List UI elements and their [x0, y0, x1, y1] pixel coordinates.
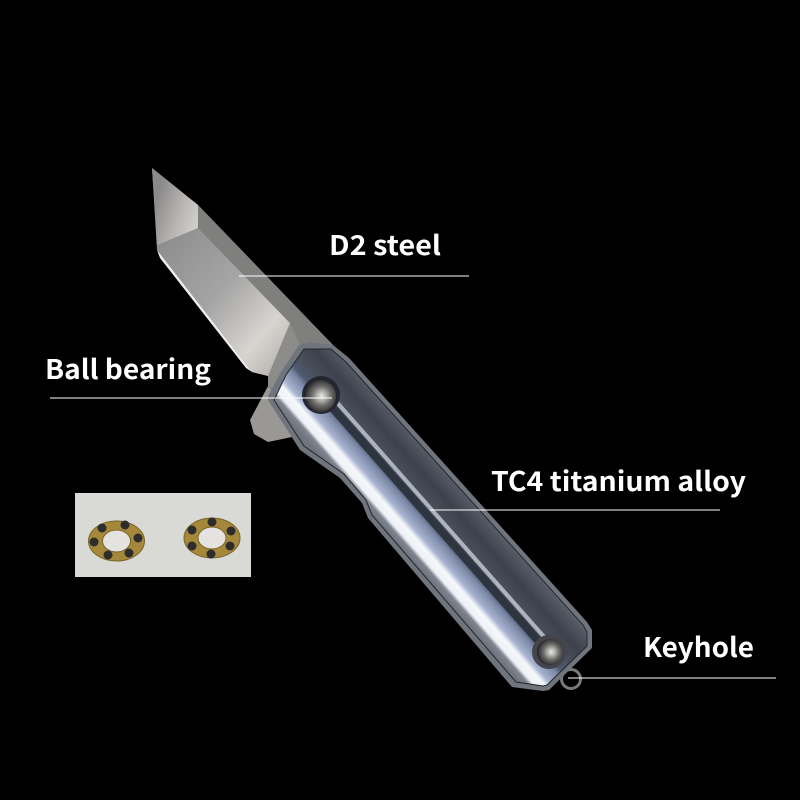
callout: Ball bearing: Ball bearing: [45, 348, 211, 387]
pin: rear screw: [532, 635, 566, 669]
knife illustration: [152, 168, 592, 691]
central rib: [321, 390, 553, 652]
handle: [268, 342, 592, 691]
icon: bearing right: [184, 518, 240, 558]
callout: D2 steel: D2 steel: [329, 224, 441, 263]
icon: key ring: [562, 670, 580, 688]
callout: Keyhole: Keyhole: [643, 626, 754, 665]
photo: thrust ball bearings: [75, 493, 251, 577]
blade: [152, 168, 333, 398]
callout: TC4 titanium alloy: TC4 titanium alloy: [491, 460, 747, 499]
flipper tab: [250, 386, 305, 442]
pin: pivot ball bearing: [302, 376, 340, 414]
icon: bearing left: [88, 520, 144, 561]
